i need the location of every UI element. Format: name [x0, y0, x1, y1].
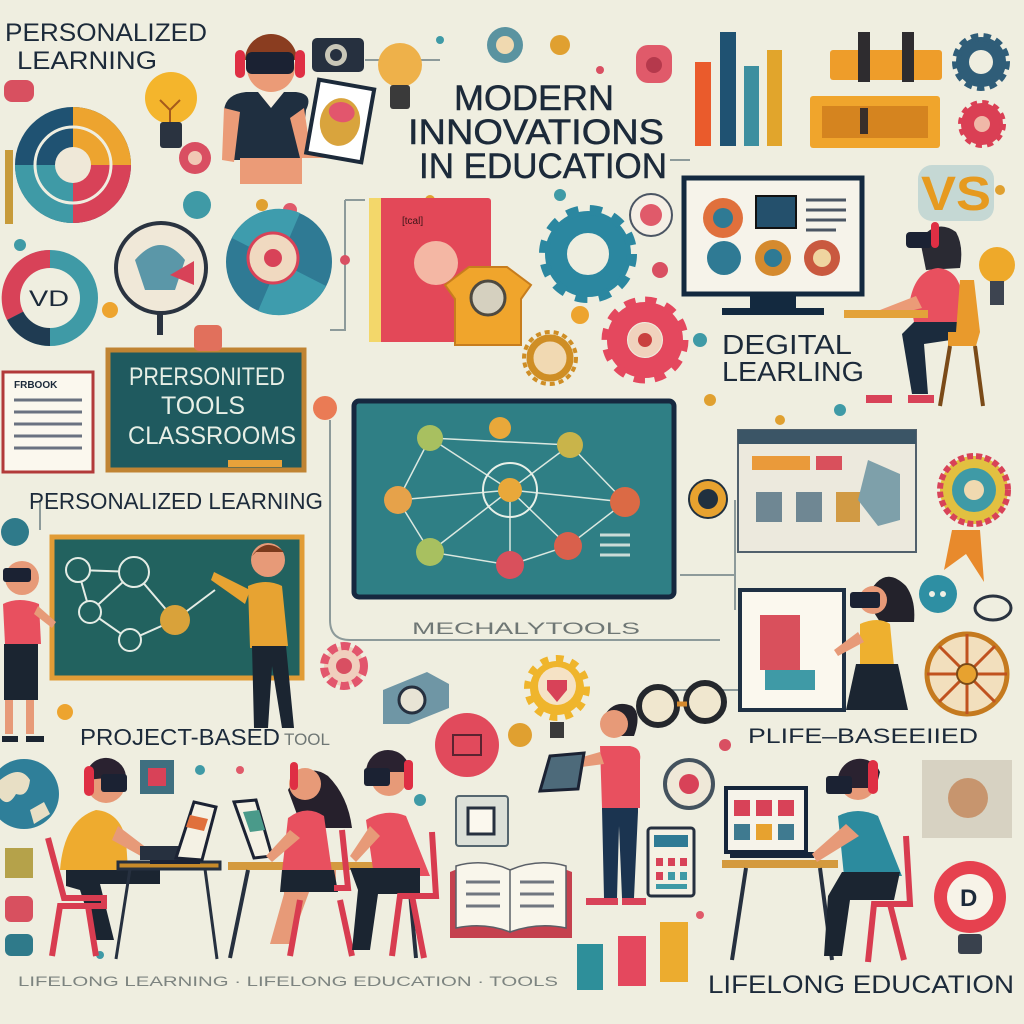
- monitor lower right: [726, 788, 814, 858]
- icon: sketch panel: [922, 760, 1012, 838]
- icon: red gem: [636, 45, 672, 83]
- heading: life-based: PLIFE–BASEEIIED: [748, 725, 978, 748]
- icon: ring chart VD: [2, 250, 98, 346]
- icon: ring chart VD: VD: [29, 286, 69, 311]
- monitor: digital lessons: [684, 178, 862, 315]
- person at desk with VR: [844, 222, 983, 406]
- student with headset centre: [266, 762, 352, 956]
- heading: project-based: TOOL: [284, 730, 330, 749]
- icon: award ribbon: [940, 456, 1008, 582]
- icon: big bulb badge: [934, 861, 1006, 954]
- icon: small oval mark: [975, 596, 1011, 620]
- person with tablet: [540, 704, 646, 905]
- heading: personalized learning top: [5, 19, 207, 75]
- chalkboard: tools: PRERSONITED: [129, 363, 285, 391]
- table lower right: [722, 860, 838, 960]
- faded footer text: LIFELONG LEARNING · LIFELONG EDUCATION · TOOLS: [18, 973, 558, 989]
- icon: tablet: [306, 80, 374, 162]
- icon: calculator: [648, 828, 694, 896]
- heading: personalized learning top: PERSONALIZED: [5, 19, 207, 47]
- student with VR left: [2, 561, 56, 742]
- chalkboard: tools: CLASSROOMS: [128, 422, 296, 450]
- icon: open workshop box: [810, 32, 942, 148]
- title: MODERN: [454, 79, 614, 118]
- chalkboard: project diagram: [52, 537, 302, 678]
- icon: device box: [456, 796, 508, 846]
- person with VR headset and tablet: [222, 34, 336, 184]
- icon: red stamp: [435, 713, 499, 777]
- icon: newspaper book: FRBOOK: [14, 380, 58, 391]
- icon: red book: [tcal]: [402, 216, 423, 227]
- pie chart top left: [15, 107, 131, 223]
- heading: digital learning: [722, 329, 864, 387]
- small stand and icons left: [4, 80, 211, 224]
- icon: magnifier globe: [116, 223, 206, 335]
- icon: wooden wheel: [927, 634, 1007, 714]
- laptop centre: [234, 800, 272, 858]
- heading: project-based: PROJECT-BASED: [80, 724, 280, 750]
- icon: open book: [450, 863, 572, 938]
- heading: digital learning: DEGITAL: [722, 329, 852, 360]
- person with VR at easel: [740, 577, 914, 710]
- icon: small gold gear: [524, 332, 576, 384]
- heading: personalized learning middle: PERSONALIZED LEARNING: [29, 488, 323, 514]
- teacher at chalkboard: [211, 543, 294, 728]
- icon: red book: [369, 198, 491, 342]
- icon: teal gear: [956, 37, 1006, 87]
- student with VR lower right: [812, 759, 910, 962]
- icon: coin badge: [689, 480, 727, 518]
- icon: newspaper book: [3, 372, 93, 472]
- bar chart: [695, 32, 782, 146]
- icon: teal button: [919, 575, 957, 613]
- title: INNOVATIONS: [408, 113, 664, 152]
- heading: lifelong education: LIFELONG EDUCATION: [708, 971, 1014, 999]
- icon: pink flower: [324, 646, 364, 686]
- icon: red gear small: [961, 103, 1003, 145]
- table middle: [228, 862, 418, 958]
- icon: VR gadget: [383, 672, 449, 724]
- icon: sun badge: [530, 661, 584, 738]
- icon: light bulb top: [378, 43, 422, 109]
- icon: teal gear large: [544, 210, 632, 298]
- icon: camera: [312, 38, 364, 72]
- heading: personalized learning top: LEARNING: [17, 47, 157, 75]
- heading: digital learning: LEARLING: [722, 356, 864, 387]
- icon: glasses: [639, 683, 724, 725]
- icon: light bulb left: [145, 72, 197, 148]
- icon: compass wheel: [226, 209, 332, 315]
- small icons left column: [5, 848, 33, 956]
- icon: small badge top: [487, 27, 570, 63]
- dashboard window: [738, 430, 916, 552]
- title: IN EDUCATION: [419, 147, 667, 186]
- icon: orange frame: [445, 267, 531, 345]
- chalkboard: tools: TOOLS: [161, 392, 245, 420]
- icon: red tag: [194, 325, 222, 351]
- icon: picture frame: [140, 760, 174, 794]
- VS badge: VS: [921, 168, 991, 221]
- bookmark cards: [577, 922, 688, 990]
- title: [408, 79, 667, 186]
- icon: light bulb right: [979, 247, 1015, 305]
- students with VR at table: [48, 758, 220, 959]
- central network screen: [354, 401, 674, 597]
- icon: big bulb badge: D: [960, 885, 977, 912]
- icon: small pink badge: [630, 194, 672, 236]
- student with VR right: [350, 750, 436, 958]
- laptop left: [150, 802, 216, 864]
- icon: round lens: [665, 760, 713, 808]
- faded label: tools: MECHALYTOOLS: [412, 619, 640, 638]
- icon: red gear: [606, 301, 684, 379]
- chalkboard: tools: [108, 350, 304, 470]
- icon: globe: [0, 759, 59, 829]
